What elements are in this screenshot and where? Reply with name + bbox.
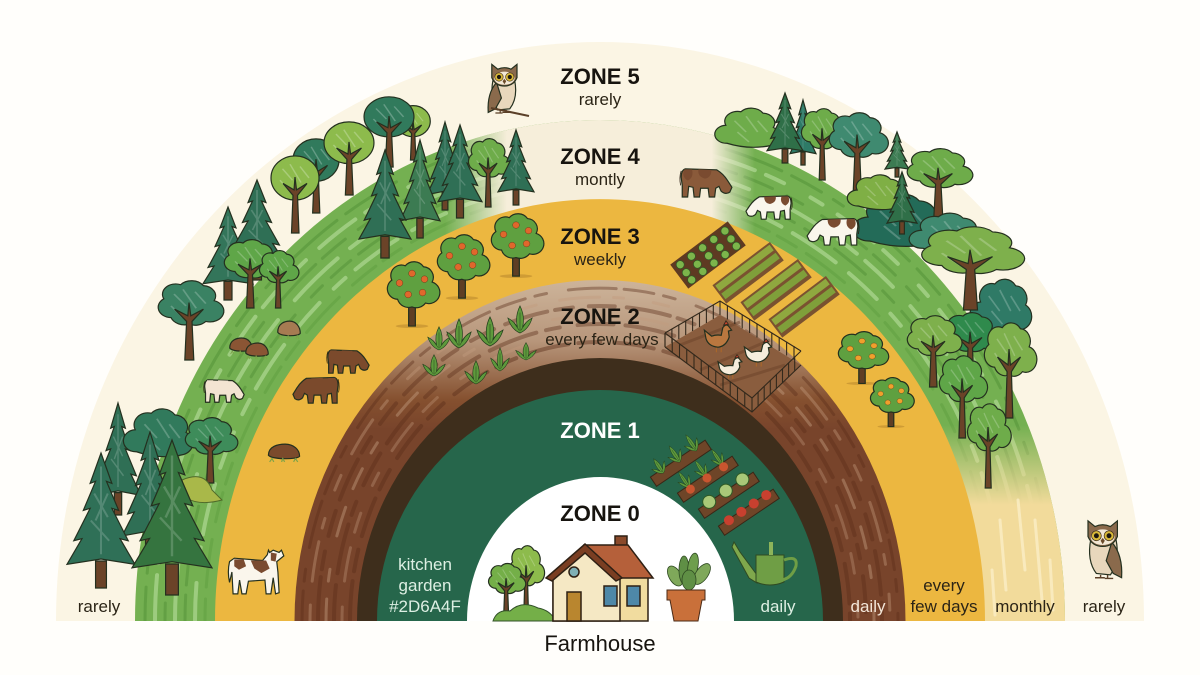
label: rarely left: rarely bbox=[78, 597, 121, 616]
panel: zone 4 ring bbox=[135, 110, 1070, 621]
animal: pale sheep zone 4 bbox=[204, 380, 244, 402]
label: kitchen garden: kitchen bbox=[398, 555, 452, 574]
chicken pen bbox=[665, 301, 801, 412]
label: zone 4: ZONE 4 bbox=[560, 144, 640, 169]
animals: brown grazers zone 4 bbox=[230, 321, 300, 359]
label: zone 3: ZONE 3 bbox=[560, 224, 640, 249]
icon: left trees beside farmhouse bbox=[489, 546, 556, 621]
label: kitchen garden: garden bbox=[399, 576, 451, 595]
group: zone 1 raised beds bbox=[642, 428, 779, 535]
label: zone 4 bbox=[560, 144, 640, 189]
panel: zone 1 kitchen garden bbox=[377, 390, 823, 621]
label: zone 2: ZONE 2 bbox=[560, 304, 640, 329]
label: zone 0: ZONE 0 bbox=[560, 501, 640, 526]
label: rarely right: rarely bbox=[1083, 597, 1126, 616]
animal: brown cow grazing zone 4 bbox=[680, 169, 732, 197]
label: every few days: every bbox=[923, 576, 965, 595]
label: kitchen garden bbox=[389, 555, 461, 616]
label: zone 3: weekly bbox=[573, 250, 626, 269]
forest: mid right trees bbox=[907, 313, 1037, 488]
panel: zone 2 ring bbox=[294, 280, 906, 621]
icon: farmhouse bbox=[546, 536, 653, 621]
group: vegetable strips in zone 3 bbox=[670, 221, 840, 338]
icon: watering can bbox=[732, 542, 796, 585]
icon: owl on branch in zone 5 bbox=[488, 64, 529, 116]
label: zone 5: rarely bbox=[579, 90, 622, 109]
label: zone 4: montly bbox=[575, 170, 626, 189]
forest: upper left trees bbox=[158, 97, 534, 360]
label: zone 2 bbox=[545, 304, 659, 349]
label: every few days bbox=[910, 576, 978, 616]
label: kitchen garden: #2D6A4F bbox=[389, 597, 461, 616]
forest: lower left pines bbox=[67, 403, 238, 595]
label: zone 5 bbox=[560, 64, 640, 109]
animal: spotted cow lower zone 4 bbox=[807, 219, 859, 245]
label: farmhouse: Farmhouse bbox=[544, 631, 656, 656]
panel: zone 3 ring bbox=[215, 199, 985, 621]
group: citrus trees in zone 3 right bbox=[838, 332, 914, 428]
animal: brown cow zone 3 lower bbox=[293, 377, 339, 403]
animal: round brown grazer zone 3 bbox=[268, 444, 300, 462]
panel: zone 1 dark soil band bbox=[357, 358, 843, 621]
animal: standing spotted cow zone 3 bbox=[228, 550, 284, 594]
label: zone 3 bbox=[560, 224, 640, 269]
forest: upper right trees bbox=[715, 93, 1032, 331]
label: every few days: few days bbox=[910, 597, 978, 616]
label: daily zone 2: daily bbox=[851, 597, 886, 616]
panel: zone 0 farmhouse area bbox=[467, 477, 734, 621]
label: monthly: monthly bbox=[995, 597, 1055, 616]
icon: potted herbs bbox=[664, 552, 714, 621]
animal: spotted cow zone 4 bbox=[746, 196, 792, 219]
label: daily zone 1: daily bbox=[761, 597, 796, 616]
group: zone 2 plants bbox=[423, 306, 536, 384]
panel: zone 5 ring bbox=[56, 42, 1144, 621]
label: zone 5: ZONE 5 bbox=[560, 64, 640, 89]
group: orchard trees in zone 3 bbox=[387, 214, 544, 328]
icon: owl in lower right bbox=[1088, 521, 1122, 578]
label: zone 2: every few days bbox=[545, 330, 659, 349]
animal: brown cow zone 3 bbox=[327, 350, 369, 373]
label: zone 1: ZONE 1 bbox=[560, 418, 640, 443]
